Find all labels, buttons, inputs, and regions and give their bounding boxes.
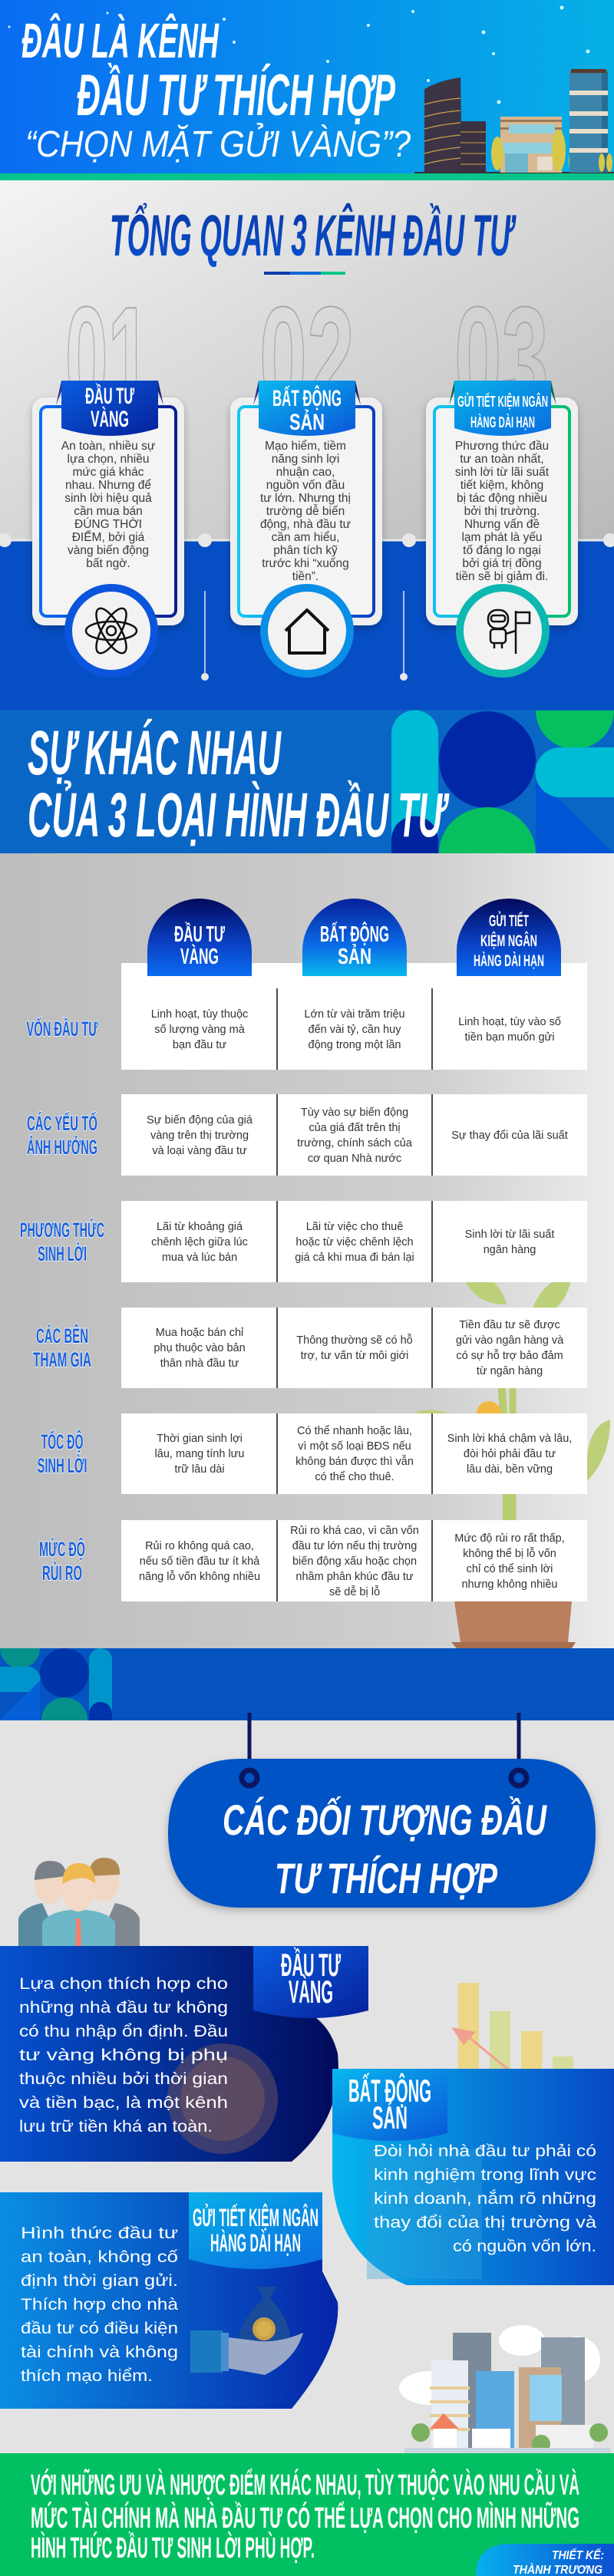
cell text: nếu số tiền đầu tư ít khả: [140, 1555, 260, 1568]
text: bởi giá trị đồng: [462, 557, 542, 570]
text: ĐÚNG THỜI: [74, 518, 142, 531]
text: An toàn, nhiều sự: [61, 440, 155, 453]
cell text: nhưng không nhiều: [461, 1578, 558, 1591]
cell text: Tùy vào sự biến động: [301, 1107, 408, 1119]
cell text: Rủi ro không quá cao,: [145, 1540, 254, 1552]
cell text: số lượng vàng mà: [154, 1024, 246, 1036]
cell text: [139, 1008, 572, 1598]
text: sinh lời từ lãi suất: [455, 466, 550, 479]
cell text: Mua hoặc bán chỉ: [156, 1327, 244, 1339]
text: bất ngờ.: [86, 557, 130, 570]
row labels: TỐC ĐỘ: [41, 1429, 83, 1453]
cell text: ngân hàng: [484, 1244, 536, 1256]
icon: atom: [64, 584, 158, 678]
text: lựa chọn, nhiều: [68, 453, 149, 466]
panel: real estate target: thay đổi của thị trường và: [374, 2214, 596, 2231]
text: nhuận cao,: [276, 466, 335, 479]
row labels: RỦI RO: [42, 1560, 82, 1585]
numbers outline: 01: [65, 277, 150, 440]
cell text: của giá đất trên thị: [309, 1122, 401, 1134]
cell text: Mức độ rủi ro rất thấp,: [454, 1532, 565, 1545]
tab: GỬI TIẾT KIỆM NGÂN: [193, 2204, 319, 2231]
cell text: không bán được thì vẫn: [295, 1455, 414, 1468]
icon: house: [260, 584, 354, 678]
header tabs: ĐẦU TƯ: [174, 921, 226, 947]
header banner: [0, 0, 614, 173]
text: ĐIỂM, bởi giá: [72, 530, 145, 544]
heading: differences banner: SỰ KHÁC NHAU: [28, 718, 282, 788]
card: gold: [32, 381, 184, 678]
tab: VÀNG: [91, 406, 129, 432]
text: năng sinh lợi: [272, 453, 339, 466]
cell text: Linh hoạt, tùy vào số: [458, 1016, 561, 1028]
text: động, nhà đầu tư: [260, 518, 351, 531]
cell text: phụ thuộc vào bản: [154, 1342, 246, 1354]
cell text: năng lỗ vốn không nhiều: [139, 1570, 260, 1583]
cell text: không thể bị lỗ vốn: [463, 1547, 556, 1560]
numbers outline: 02: [259, 277, 355, 440]
panel: comparison table: [0, 853, 614, 1648]
panel: savings target: [0, 2192, 338, 2409]
icon: city illustration: [399, 2325, 610, 2454]
cell text: Lớn từ vài trăm triệu: [304, 1008, 405, 1021]
panel: savings target: đầu tư có điều kiện: [21, 2320, 178, 2337]
panel: real estate target: kinh nghiệm trong lĩnh vực: [374, 2166, 596, 2184]
text: tiền”.: [292, 570, 319, 583]
tab: HÀNG DÀI HẠN: [210, 2229, 301, 2257]
text: tư lớn. Nhưng thị: [260, 492, 351, 505]
card: savings: [426, 381, 578, 678]
panel: real estate target: có nguồn vốn lớn.: [453, 2238, 596, 2255]
panel: comparison table: GỬI TIẾT: [489, 912, 529, 930]
row labels: THAM GIA: [33, 1348, 91, 1371]
panel: savings target: an toàn, không cố: [21, 2248, 178, 2266]
cell text: và loại vàng đầu tư: [152, 1145, 247, 1157]
row labels: ẢNH HƯỞNG: [27, 1134, 97, 1159]
cell text: vàng trên thị trường: [150, 1130, 249, 1142]
text: cần am hiểu,: [272, 531, 339, 544]
row cells: [121, 963, 587, 1601]
tab: BẤT ĐỘNG: [272, 385, 342, 411]
credit: THIẾT KẾ:: [552, 2548, 604, 2562]
text: tiền sẽ bị giảm đi.: [456, 570, 548, 583]
text: trường dễ biến: [266, 505, 345, 518]
panel: gold target: [0, 1946, 368, 2162]
text: nguồn vốn đầu: [266, 479, 345, 492]
panel: gold target: thuộc nhiều bởi thời gian: [19, 2070, 228, 2088]
icon: skyline: [414, 69, 614, 174]
cell text: vì một số loại BĐS nếu: [298, 1440, 411, 1453]
stars: [8, 6, 589, 104]
tab: VÀNG: [289, 1974, 333, 2010]
heading sign: [168, 1713, 596, 1908]
cell text: có thể cho thuê.: [315, 1471, 394, 1483]
panel: gold target: những nhà đầu tư không: [19, 1999, 228, 2017]
text: mức giá khác: [72, 466, 144, 479]
tab: SẢN: [289, 409, 325, 435]
panel: gold target: lưu trữ tiền khá an toàn.: [19, 2118, 213, 2136]
panel: real estate target: [332, 2069, 614, 2285]
cell text: giá cả khi mua đi bán lại: [295, 1252, 414, 1264]
cell text: Lãi từ việc cho thuê: [306, 1221, 403, 1233]
cell text: Thời gian sinh lợi: [157, 1433, 243, 1445]
text: cần mua bán: [74, 505, 143, 518]
text: [455, 440, 550, 583]
text: Phương thức đầu: [455, 440, 549, 453]
cell text: từ ngân hàng: [477, 1365, 543, 1377]
row labels: PHƯƠNG THỨC: [20, 1218, 104, 1242]
tab: [189, 2192, 322, 2269]
panel: savings target: định thời gian gửi.: [21, 2272, 178, 2290]
cell text: thân nhà đầu tư: [160, 1357, 239, 1370]
text: bởi thị trường.: [464, 505, 540, 518]
tab: ĐẦU TƯ: [281, 1947, 341, 1983]
footer: conclusion: [0, 2453, 614, 2576]
text: tố đáng lo ngại: [463, 544, 541, 557]
cell text: đầu tư lớn nếu thị trường: [292, 1540, 417, 1552]
tab: BẤT ĐỘNG: [348, 2072, 431, 2109]
panel: savings target: Hình thức đầu tư: [21, 2225, 178, 2242]
icon: money bag hand: [190, 2287, 303, 2375]
panel: savings target: thích mạo hiểm.: [21, 2367, 153, 2385]
panel: gold target: và tiền bạc, là một kênh: [19, 2094, 228, 2112]
heading sign: TƯ THÍCH HỢP: [275, 1854, 497, 1902]
text: trước khi “xuống: [262, 557, 349, 570]
row labels: SINH LỜI: [37, 1453, 87, 1477]
card: real estate: [230, 381, 382, 678]
title: [21, 12, 411, 165]
panel: gold target: Lựa chọn thích hợp cho: [19, 1975, 228, 1993]
credit: [476, 2544, 614, 2576]
cell text: Sự biến động của giá: [147, 1114, 253, 1126]
cell text: Thông thường sẽ có hỗ: [296, 1334, 413, 1347]
text: [260, 440, 351, 583]
tab: SẢN: [372, 2099, 408, 2136]
title: “CHỌN MẶT GỬI VÀNG”?: [25, 122, 411, 165]
panel: comparison table: BẤT ĐỘNG: [320, 921, 389, 947]
text: Mạo hiểm, tiềm: [265, 440, 346, 453]
text: Nhưng vấn đề: [464, 518, 540, 531]
cell text: đòi hỏi phải đầu tư: [464, 1448, 556, 1460]
header tabs: [147, 899, 252, 976]
tab: [332, 2069, 447, 2141]
cell text: hoặc từ việc chênh lệch: [295, 1236, 414, 1248]
cell text: Sự thay đổi của lãi suất: [451, 1130, 568, 1142]
row labels: CÁC YẾU TỐ: [27, 1110, 97, 1135]
cell text: Sinh lời từ lãi suất: [465, 1229, 554, 1241]
row labels: [20, 1016, 104, 1585]
tab: [253, 1946, 368, 2018]
cell text: mua và lúc bán: [162, 1252, 237, 1264]
cell text: sẽ dễ bị lỗ: [329, 1585, 380, 1598]
cell text: tiền bạn muốn gửi: [465, 1031, 554, 1044]
panel: real estate target: kinh doanh, nắm rõ những: [374, 2190, 596, 2208]
tab: [56, 381, 163, 436]
decorative shapes: [391, 710, 614, 853]
numbers outline: 03: [454, 277, 549, 440]
tab: GỬI TIẾT KIỆM NGÂN: [457, 392, 548, 411]
text: tiết kiệm, không: [460, 479, 543, 492]
text: nhau. Nhưng để: [65, 479, 151, 492]
tab: HÀNG DÀI HẠN: [470, 414, 535, 431]
cell text: cơ quan Nhà nước: [308, 1153, 401, 1165]
cell text: Sinh lời khá chậm và lâu,: [447, 1433, 572, 1445]
cell text: Có thể nhanh hoặc lâu,: [297, 1425, 412, 1437]
icon: bar chart: [451, 1983, 614, 2156]
numbers outline: [65, 277, 549, 440]
text: tư an toàn nhất,: [460, 453, 544, 466]
cell text: đến vài tỷ, cần huy: [309, 1024, 401, 1036]
panel: savings target: Thích hợp cho nhà: [21, 2296, 178, 2314]
text: sinh lời hiệu quả: [64, 492, 152, 505]
footer: conclusion: HÌNH THỨC ĐẦU TƯ SINH LỜI PHÙ HỢP.: [31, 2531, 315, 2564]
panel: savings target: tài chính và không: [21, 2343, 178, 2361]
cell text: chỉ có thể sinh lời: [467, 1563, 553, 1575]
heading: differences banner: [0, 710, 614, 853]
row labels: CÁC BÊN: [36, 1324, 88, 1347]
row labels: SINH LỜI: [38, 1242, 87, 1265]
icon: plant pot: [416, 1266, 610, 1648]
icon: astronaut: [456, 584, 550, 678]
text: bị tác động nhiều: [457, 492, 547, 505]
title: ĐÂU LÀ KÊNH: [21, 12, 220, 68]
row labels: VỐN ĐẦU TƯ: [26, 1016, 98, 1041]
cell text: lâu, mang tính lưu: [155, 1448, 244, 1460]
cell text: nhầm phân khúc đầu tư: [295, 1571, 414, 1583]
panel: real estate target: Đòi hỏi nhà đầu tư phải có: [374, 2142, 596, 2160]
row labels: MỨC ĐỘ: [39, 1537, 85, 1561]
cell text: Rủi ro khá cao, vì cần vốn: [290, 1525, 419, 1537]
panel: gold target: tư vàng không bị phụ: [19, 2047, 228, 2064]
cell text: trường, chính sách của: [297, 1137, 413, 1149]
cell text: trợ, tư vấn từ môi giới: [301, 1350, 408, 1362]
text: [61, 440, 155, 570]
blue band under cards: [0, 533, 614, 710]
cell text: trữ lâu dài: [174, 1463, 225, 1476]
cell text: có sự hỗ trợ bảo đảm: [456, 1349, 563, 1362]
cell text: lâu dài, bền vững: [467, 1463, 553, 1476]
cell text: gửi vào ngân hàng và: [456, 1334, 564, 1347]
tab: [253, 381, 361, 436]
tab: [449, 381, 556, 436]
cell text: Linh hoạt, tùy thuộc: [151, 1008, 248, 1021]
panel: suitable investors section: [0, 1713, 614, 2454]
panel: comparison table: KIỆM NGÂN: [480, 932, 537, 950]
panel: comparison table: SẢN: [338, 943, 371, 969]
panel: overview section: [0, 180, 614, 541]
cell text: Lãi từ khoảng giá: [157, 1221, 243, 1233]
cell text: bạn đầu tư: [173, 1039, 226, 1051]
blue band with shapes: [0, 1648, 614, 1720]
text: phân tích kỹ: [273, 544, 338, 557]
text: vàng biến động: [68, 544, 149, 557]
panel: gold target: có thu nhập ổn định. Đầu: [19, 2023, 228, 2040]
header tabs: VÀNG: [180, 943, 219, 969]
tab: ĐẦU TƯ: [85, 383, 134, 409]
text: lạm phát là yếu: [461, 531, 543, 544]
icon: business people: [18, 1858, 140, 1946]
cell text: động trong một lần: [309, 1039, 401, 1051]
panel: comparison table: HÀNG DÀI HẠN: [474, 952, 544, 970]
cell text: Tiền đầu tư sẽ được: [459, 1319, 560, 1331]
cell text: biến động xấu hoặc chọn: [292, 1555, 417, 1568]
cell text: chênh lệch giữa lúc: [151, 1236, 248, 1248]
